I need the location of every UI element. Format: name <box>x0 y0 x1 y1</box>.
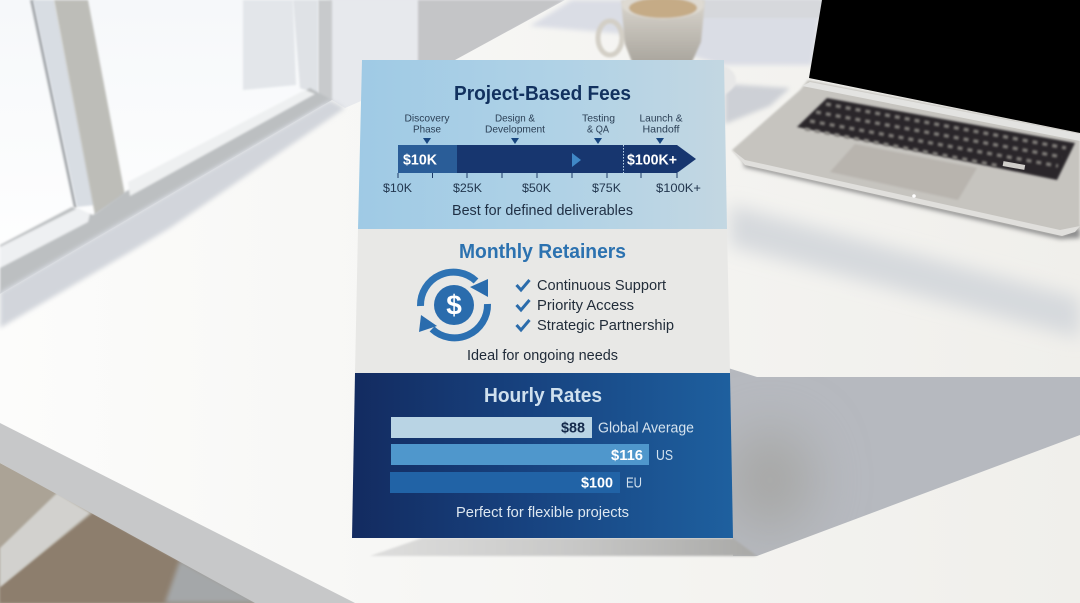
caption: perfect for flexible projects: Perfect for flexible projects <box>456 505 629 521</box>
laptop base <box>744 160 1080 239</box>
axis ticks and labels: $75K <box>592 181 621 195</box>
phase labels: Development <box>485 124 545 136</box>
panel: monthly retainers <box>355 229 730 373</box>
bar chart: $100 <box>581 476 613 492</box>
icon: recurring dollar: $ <box>446 290 462 320</box>
phase labels <box>404 112 682 136</box>
phase labels: Design & <box>495 112 535 124</box>
window and wall background <box>0 0 1080 300</box>
heading: hourly rates: Hourly Rates <box>484 385 602 407</box>
axis ticks and labels <box>383 173 701 195</box>
bar chart: $88 <box>561 420 585 436</box>
axis ticks and labels: $100K+ <box>656 181 701 195</box>
desk front edge and floor <box>0 423 355 603</box>
phase labels: Launch & <box>640 112 682 124</box>
checklist: Continuous Support <box>537 277 667 294</box>
bar chart: $116 <box>611 448 643 464</box>
timeline arrow bar: $100K+ <box>627 152 677 168</box>
phase labels: Discovery <box>404 112 450 124</box>
bar chart: Global Average <box>598 420 694 436</box>
panel: project-based fees <box>358 60 727 229</box>
heading: monthly retainers: Monthly Retainers <box>459 241 626 263</box>
phase labels: Phase <box>413 124 441 136</box>
timeline arrow bar <box>398 145 696 173</box>
axis ticks and labels: $25K <box>453 181 482 195</box>
phase labels: Handoff <box>642 124 680 136</box>
caption: ideal for ongoing needs: Ideal for ongoing needs <box>467 348 618 364</box>
panel: hourly rates <box>352 373 733 538</box>
window sill <box>0 88 332 294</box>
bar chart: US <box>656 447 673 464</box>
checklist: Strategic Partnership <box>537 317 674 334</box>
phase markers <box>423 138 664 144</box>
icon: recurring dollar <box>419 272 488 338</box>
icon: coffee cup <box>598 0 736 100</box>
bar chart: EU <box>626 474 642 492</box>
laptop <box>732 0 1080 239</box>
checklist <box>516 277 674 334</box>
poster <box>352 60 757 556</box>
checklist: Priority Access <box>537 297 634 314</box>
laptop trackpad <box>830 144 977 200</box>
bar chart <box>390 417 694 493</box>
laptop keyboard <box>797 98 1075 180</box>
caption: best for defined deliverables: Best for defined deliverables <box>452 203 633 219</box>
phase labels: & QA <box>587 124 609 136</box>
heading: project-based fees: Project-Based Fees <box>454 83 631 105</box>
phase labels: Testing <box>582 112 615 124</box>
axis ticks and labels: $50K <box>522 181 551 195</box>
axis ticks and labels: $10K <box>383 181 412 195</box>
poster shadow <box>370 538 757 556</box>
laptop screen <box>809 0 1080 133</box>
timeline arrow bar: $10K <box>403 152 438 168</box>
